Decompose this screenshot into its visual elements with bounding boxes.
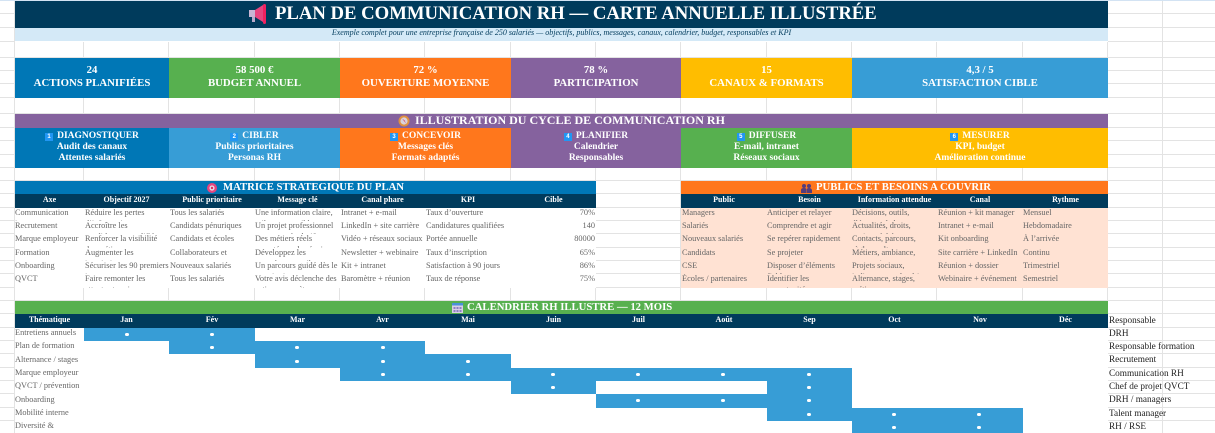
row: recrutement: Recrutement: [15, 221, 57, 230]
row: communication interne: Taux d’ouverture: [426, 208, 483, 217]
table header: publics: Canal: [970, 195, 990, 204]
heading: cycle de communication: [15, 114, 1108, 128]
responsable column: Responsable formation: [1109, 342, 1195, 352]
row: écoles et partenaires: Webinaire + événement: [938, 274, 1017, 283]
row: recrutement: 140: [583, 221, 595, 230]
KPI: ouverture moyenne: 72 %: [413, 64, 438, 76]
icon: compass: [398, 116, 410, 126]
month labels: Fév: [206, 315, 218, 324]
row: marque employeur: 80000: [574, 234, 595, 243]
row: onboarding: Onboarding: [15, 261, 55, 270]
row: onboarding: 86%: [580, 261, 595, 270]
row: managers: Anticiper et relayer: [767, 208, 832, 217]
responsable column: DRH: [1109, 329, 1129, 339]
KPI: actions planifiées: [15, 58, 169, 98]
step 4: planifier: [511, 128, 681, 168]
row: nouveaux salariés: Kit onboarding: [938, 234, 988, 243]
month labels: Thématique: [29, 315, 70, 324]
step 6: mesurer: MESURER: [962, 130, 1010, 140]
heading: matrice stratégique: [15, 181, 596, 194]
theme labels: Entretiens annuels: [15, 328, 76, 337]
row: communication interne: 70%: [580, 208, 595, 217]
icon: calendar: [452, 303, 463, 313]
row: candidats: Se projeter: [767, 248, 803, 257]
panel: matrice stratégique: [15, 181, 596, 288]
title: [15, 1, 1108, 28]
step 2: cibler: Personas RH: [228, 153, 281, 163]
row: onboarding: Nouveaux salariés: [170, 261, 231, 270]
step 4: planifier: 4: [566, 134, 570, 140]
step 2: cibler: [169, 128, 340, 168]
step 1: diagnostiquer: Audit des canaux: [57, 142, 127, 152]
step 3: concevoir: CONCEVOIR: [402, 130, 461, 140]
row: QVCT: 75%: [580, 274, 595, 283]
responsable column: [1109, 316, 1195, 432]
KPI: participation: 78 %: [584, 64, 608, 76]
KPI: budget annuel: [169, 58, 340, 98]
KPI: ouverture moyenne: OUVERTURE MOYENNE: [362, 77, 489, 89]
row: QVCT: QVCT: [15, 274, 38, 283]
row: managers: [682, 208, 1052, 221]
row: QVCT: Baromètre + réunion: [341, 274, 410, 283]
row: CSE: Trimestriel: [1023, 261, 1060, 270]
panel: publics et besoins: [681, 181, 1108, 288]
panel: calendrier: [15, 314, 1108, 433]
KPI: canaux et formats: [681, 58, 852, 98]
responsable column: Chef de projet QVCT: [1109, 382, 1189, 392]
row: écoles et partenaires: [682, 274, 1058, 288]
heading: matrice stratégique: MATRICE STRATEGIQUE DU PLAN: [223, 181, 404, 193]
row: candidats: Continu: [1023, 248, 1050, 257]
table header: matrice: Public prioritaire: [182, 195, 242, 204]
responsable column: RH / RSE: [1109, 422, 1146, 432]
responsable column: Communication RH: [1109, 369, 1184, 379]
row: onboarding: Satisfaction à 90 jours: [426, 261, 500, 270]
theme labels: QVCT / prévention: [15, 381, 79, 390]
row: candidats: Site carrière + LinkedIn: [938, 248, 1018, 257]
row: communication interne: Tous les salariés: [170, 208, 224, 217]
row: nouveaux salariés: À l’arrivée: [1023, 234, 1059, 243]
row: managers: Mensuel: [1023, 208, 1052, 217]
row: candidats: [682, 248, 1050, 261]
step 3: concevoir: 3: [392, 134, 396, 140]
month labels: Avr: [376, 315, 389, 324]
step 5: diffuser: Réseaux sociaux: [733, 153, 800, 163]
row: formation: Newsletter + webinaire: [341, 248, 418, 257]
responsable column: Talent manager: [1109, 409, 1166, 419]
row: communication interne: Intranet + e-mail: [341, 208, 397, 217]
step 1: diagnostiquer: [15, 128, 169, 168]
month labels: Juin: [546, 315, 561, 324]
month labels: Mai: [461, 315, 475, 324]
theme labels: [15, 328, 80, 433]
KPI: satisfaction cible: [852, 58, 1108, 98]
KPI: participation: PARTICIPATION: [554, 77, 638, 89]
KPI: actions planifiées: 24: [87, 64, 97, 76]
row: candidats: Candidats: [682, 248, 715, 257]
row: QVCT: Taux de réponse: [426, 274, 480, 283]
step 5: diffuser: 5: [739, 134, 742, 140]
table header: matrice: KPI: [461, 195, 475, 204]
heading: calendrier: [15, 301, 1108, 314]
table header: publics: Information attendue: [858, 195, 931, 204]
row: salariés: Hebdomadaire: [1023, 221, 1072, 230]
responsable column: Responsable: [1109, 316, 1156, 326]
step 6: mesurer: KPI, budget: [955, 142, 1005, 152]
theme labels: Plan de formation: [15, 341, 74, 350]
step 6: mesurer: 6: [953, 134, 956, 140]
title: PLAN DE COMMUNICATION RH — CARTE ANNUELLE ILLUSTRÉE: [275, 3, 877, 24]
step 3: concevoir: Formats adaptés: [392, 153, 459, 163]
row: marque employeur: Candidats et écoles: [170, 234, 234, 243]
step 4: planifier: Calendrier: [574, 142, 618, 152]
step 1: diagnostiquer: DIAGNOSTIQUER: [57, 130, 139, 140]
step 1: diagnostiquer: Attentes salariés: [59, 153, 125, 163]
row: écoles et partenaires: Écoles / partenaires: [682, 274, 747, 283]
heading: publics et besoins: PUBLICS ET BESOINS A COUVRIR: [816, 181, 991, 193]
row: formation: Taux d’inscription: [426, 248, 487, 257]
row: onboarding: [15, 261, 595, 274]
month labels: Juil: [632, 315, 645, 324]
heading: calendrier: CALENDRIER RH ILLUSTRE — 12 MOIS: [467, 301, 672, 313]
row: CSE: Réunion + dossier: [938, 261, 998, 270]
month labels: Oct: [888, 315, 901, 324]
row: marque employeur: Marque employeur: [15, 234, 78, 243]
KPI: satisfaction cible: SATISFACTION CIBLE: [922, 77, 1038, 89]
month labels: Sep: [803, 315, 816, 324]
step 6: mesurer: Amélioration continue: [934, 153, 1026, 163]
row: CSE: CSE: [682, 261, 697, 270]
step 5: diffuser: DIFFUSER: [749, 130, 796, 140]
row: managers: Réunion + kit manager: [938, 208, 1014, 217]
month labels: Jan: [120, 315, 133, 324]
row: écoles et partenaires: Semestriel: [1023, 274, 1058, 283]
row: formation: [15, 248, 595, 261]
row: CSE: [682, 261, 1060, 274]
table header: matrice: [15, 194, 596, 208]
KPI: actions planifiées: ACTIONS PLANIFIÉES: [34, 77, 150, 89]
step 4: planifier: Responsables: [569, 153, 623, 163]
step 3: concevoir: [340, 128, 511, 168]
row: QVCT: [15, 274, 595, 288]
theme labels: Onboarding: [15, 395, 55, 404]
row: marque employeur: Vidéo + réseaux sociaux: [341, 234, 422, 243]
table header: matrice: Message clé: [277, 195, 318, 204]
table header: publics: Public: [713, 195, 735, 204]
row: marque employeur: Portée annuelle: [426, 234, 477, 243]
row: QVCT: Tous les salariés: [170, 274, 224, 283]
row: formation: Formation: [15, 248, 50, 257]
table header: publics: Rythme: [1052, 195, 1079, 204]
subtitle: [15, 28, 1108, 41]
row: recrutement: Candidats pénuriques: [170, 221, 242, 230]
responsable column: Recrutement: [1109, 355, 1156, 365]
row: salariés: [682, 221, 1072, 234]
KPI: satisfaction cible: 4,3 / 5: [966, 64, 994, 76]
row: formation: 65%: [580, 248, 595, 257]
theme labels: Mobilité interne: [15, 408, 69, 417]
table header: publics: [681, 194, 1108, 208]
step 2: cibler: 2: [233, 134, 236, 140]
subtitle: Exemple complet pour une entreprise française de 250 salariés — objectifs, publics, messages, canaux, calendrier, budget, responsables et KPI: [332, 28, 791, 37]
step 5: diffuser: [681, 128, 852, 168]
step 2: cibler: CIBLER: [242, 130, 279, 140]
calendar header: [15, 314, 1108, 328]
step 5: diffuser: E-mail, intranet: [734, 142, 799, 152]
row: managers: Managers: [682, 208, 715, 217]
month labels: Mar: [290, 315, 305, 324]
step 3: concevoir: Messages clés: [398, 142, 453, 152]
step 6: mesurer: [852, 128, 1108, 168]
heading: publics et besoins: [681, 181, 1108, 194]
KPI: canaux et formats: 15: [761, 64, 772, 76]
KPI: ouverture moyenne: [340, 58, 511, 98]
row: recrutement: LinkedIn + site carrière: [341, 221, 419, 230]
row: salariés: Salariés: [682, 221, 708, 230]
table header: matrice: Objectif 2027: [104, 195, 150, 204]
KPI: budget annuel: BUDGET ANNUEL: [208, 77, 301, 89]
row: nouveaux salariés: [682, 234, 1059, 248]
row: nouveaux salariés: Se repérer rapidement: [767, 234, 840, 243]
icon: target: [207, 183, 217, 193]
month labels: Déc: [1059, 315, 1072, 324]
month labels: Août: [716, 315, 732, 324]
row: onboarding: Kit + intranet: [341, 261, 386, 270]
icon: megaphone: [249, 4, 266, 24]
row: salariés: Comprendre et agir: [767, 221, 832, 230]
responsable column: DRH / managers: [1109, 395, 1171, 405]
table header: publics: Besoin: [798, 195, 821, 204]
step 1: diagnostiquer: 1: [47, 134, 51, 140]
row: salariés: Intranet + e-mail: [938, 221, 994, 230]
table header: matrice: Axe: [43, 195, 56, 204]
month labels: Nov: [973, 315, 987, 324]
KPI: participation: [511, 58, 681, 98]
table header: matrice: Cible: [544, 195, 563, 204]
theme labels: Marque employeur: [15, 368, 78, 377]
theme labels: Alternance / stages: [15, 355, 78, 364]
row: communication interne: [15, 208, 595, 221]
month labels: [29, 315, 1072, 324]
step 4: planifier: PLANIFIER: [576, 130, 628, 140]
KPI: canaux et formats: CANAUX & FORMATS: [709, 77, 824, 89]
row: recrutement: Candidatures qualifiées: [426, 221, 504, 230]
table header: matrice: Canal phare: [361, 195, 404, 204]
row: marque employeur: [15, 234, 595, 248]
icon: people: [801, 184, 812, 193]
step 2: cibler: Publics prioritaires: [215, 142, 294, 152]
row: nouveaux salariés: Nouveaux salariés: [682, 234, 743, 243]
row: recrutement: [15, 221, 595, 234]
KPI: budget annuel: 58 500 €: [236, 64, 273, 76]
